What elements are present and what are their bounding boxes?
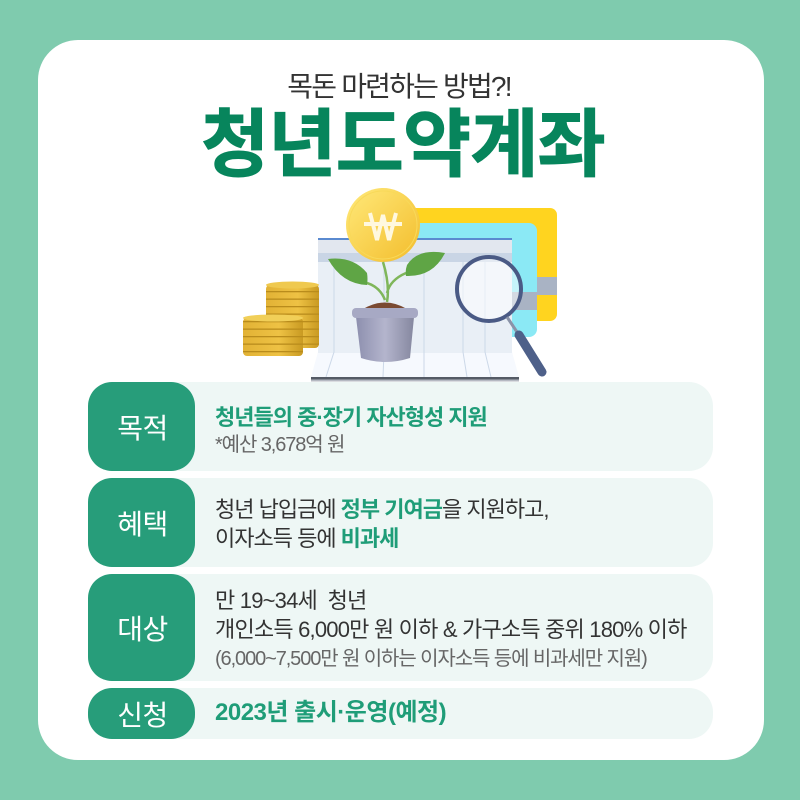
icon: flower pot (352, 302, 418, 362)
label: application: 신청 (117, 700, 168, 730)
text: eligibility: 만 19~34세 청년 (215, 588, 366, 613)
icon: magnifier (457, 257, 542, 372)
label: purpose (88, 382, 195, 471)
icon: yellow card (400, 208, 557, 321)
title: 청년도약계좌 (201, 103, 605, 186)
icon: blue card (400, 223, 537, 337)
icon: front coin stack (243, 314, 303, 356)
icon: rear coin stack (266, 282, 319, 348)
subtitle: 목돈 마련하는 방법?! (287, 71, 511, 102)
icon: document panel (311, 238, 519, 382)
label: benefits: 혜택 (117, 508, 168, 540)
text: application: 2023년 출시·운영(예정) (215, 699, 446, 726)
text: purpose: *예산 3,678억 원 (215, 434, 344, 456)
text: eligibility (215, 588, 687, 670)
text: purpose (215, 405, 487, 456)
illustration: plant, coins and magnifier (243, 188, 557, 382)
icon: won coin (346, 188, 420, 262)
label: purpose: 목적 (117, 412, 168, 444)
icon: plant stem and leaves (328, 252, 445, 302)
panel: eligibility (88, 574, 713, 681)
text: benefits: 청년 납입금에 정부 기여금을 지원하고, (215, 496, 548, 522)
text: eligibility: 개인소득 6,000만 원 이하 & 가구소득 중위 180% 이하 (215, 617, 687, 642)
panel: application (88, 688, 713, 739)
panel: benefits (88, 478, 713, 567)
text: purpose: 청년들의 중·장기 자산형성 지원 (215, 405, 487, 430)
text: benefits: 이자소득 등에 비과세 (215, 526, 398, 550)
label: benefits (88, 478, 195, 567)
label: eligibility (88, 574, 195, 681)
panel: purpose (88, 382, 713, 471)
label: application (88, 688, 195, 739)
label: eligibility: 대상 (117, 614, 168, 644)
text: eligibility: (6,000~7,500만 원 이하는 이자소득 등에 비과세만 지원) (215, 648, 647, 670)
text: benefits (215, 496, 548, 550)
